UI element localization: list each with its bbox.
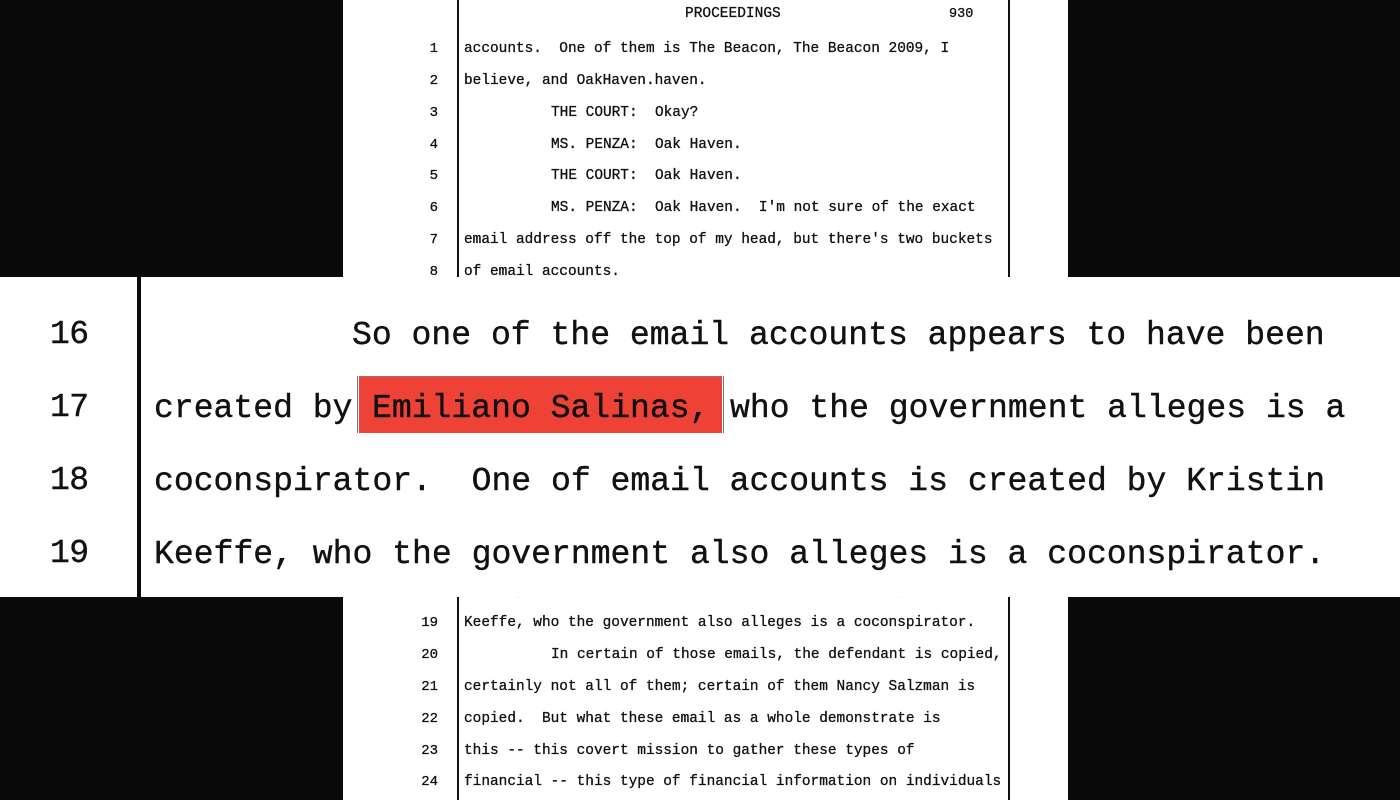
enlarged transcript text: who the government alleges is a [730,389,1345,427]
enlarged line numbers 16 to 19: 19 [50,535,88,572]
highlight bar [359,376,722,433]
line numbers 1 to 8: 2 [430,73,438,89]
left margin rule [457,597,459,800]
enlarged line numbers 16 to 19: 16 [50,316,88,353]
line numbers 1 to 8: 5 [430,168,438,184]
left margin rule [457,0,459,277]
line numbers 19 to 24: 24 [421,774,438,790]
black panel: bottom right [1068,597,1400,800]
line numbers 1 to 8: 1 [430,41,438,57]
transcript text lines 1 to 8 [464,40,992,277]
page number: 930 [949,7,973,22]
line numbers 1 to 8: 6 [430,200,438,216]
highlight: Emiliano Salinas [357,376,724,433]
enlarged line numbers 16 to 19: 17 [50,389,88,426]
enlarged transcript text: Keeffe, who the government also alleges is a coconspirator. [154,535,1325,573]
transcript text lines 1 to 8: MS. PENZA: Oak Haven. [551,137,742,153]
transcript text lines 19 to 24: In certain of those emails, the defendant is copied, [551,647,1002,663]
transcript text lines 1 to 8: accounts. One of them is The Beacon, The Beacon 2009, I [464,41,949,57]
transcript text lines 1 to 8: THE COURT: Okay? [551,105,698,121]
line numbers 19 to 24: 19 [421,615,438,631]
right margin rule [1008,597,1010,800]
line numbers 19 to 24 [421,615,438,790]
line numbers 1 to 8: 3 [430,105,438,121]
line numbers 1 to 8: 4 [430,137,438,153]
right margin rule [1008,0,1010,277]
transcript text lines 19 to 24: this -- this covert mission to gather these types of [464,743,915,759]
transcript text lines 19 to 24: copied. But what these email as a whole demonstrate is [464,711,941,727]
vertical margin rule [137,277,141,597]
panel: enlarged transcript band [0,277,1400,597]
enlarged transcript text: coconspirator. One of email accounts is created by Kristin [154,462,1325,500]
line numbers 19 to 24: 23 [421,743,438,759]
page header: PROCEEDINGS: PROCEEDINGS [685,6,781,22]
transcript text lines 19 to 24 [464,614,1002,790]
enlarged transcript text [154,316,1345,573]
line numbers 19 to 24: 22 [421,711,438,727]
transcript text lines 1 to 8: THE COURT: Oak Haven. [551,168,742,184]
transcript text lines 1 to 8: email address off the top of my head, but there's two buckets [464,232,992,248]
transcript text lines 19 to 24: certainly not all of them; certain of them Nancy Salzman is [464,679,975,695]
transcript text lines 19 to 24: financial -- this type of financial information on individuals [464,774,1001,790]
transcript text lines 19 to 24: Keeffe, who the government also alleges is a coconspirator. [464,615,975,631]
enlarged line numbers 16 to 19 [50,316,88,572]
line numbers 19 to 24: 20 [421,647,438,663]
enlarged line numbers 16 to 19: 18 [50,462,88,499]
black panel: bottom left [0,597,343,800]
line numbers 19 to 24: 21 [421,679,438,695]
enlarged transcript text: created by [154,389,353,427]
line numbers 1 to 8: 7 [430,232,438,248]
enlarged transcript text: Emiliano Salinas, [372,389,709,427]
panel: transcript page, lower excerpt [421,597,1010,800]
black panel: top right [1068,0,1400,277]
transcript text lines 1 to 8: MS. PENZA: Oak Haven. I'm not sure of the exact [551,200,976,216]
enlarged transcript text: So one of the email accounts appears to have been [352,316,1325,354]
panel: transcript page, upper excerpt [430,0,1010,277]
black panel: top left [0,0,343,277]
transcript text lines 1 to 8: believe, and OakHaven.haven. [464,73,707,89]
line numbers 1 to 8 [430,41,438,277]
